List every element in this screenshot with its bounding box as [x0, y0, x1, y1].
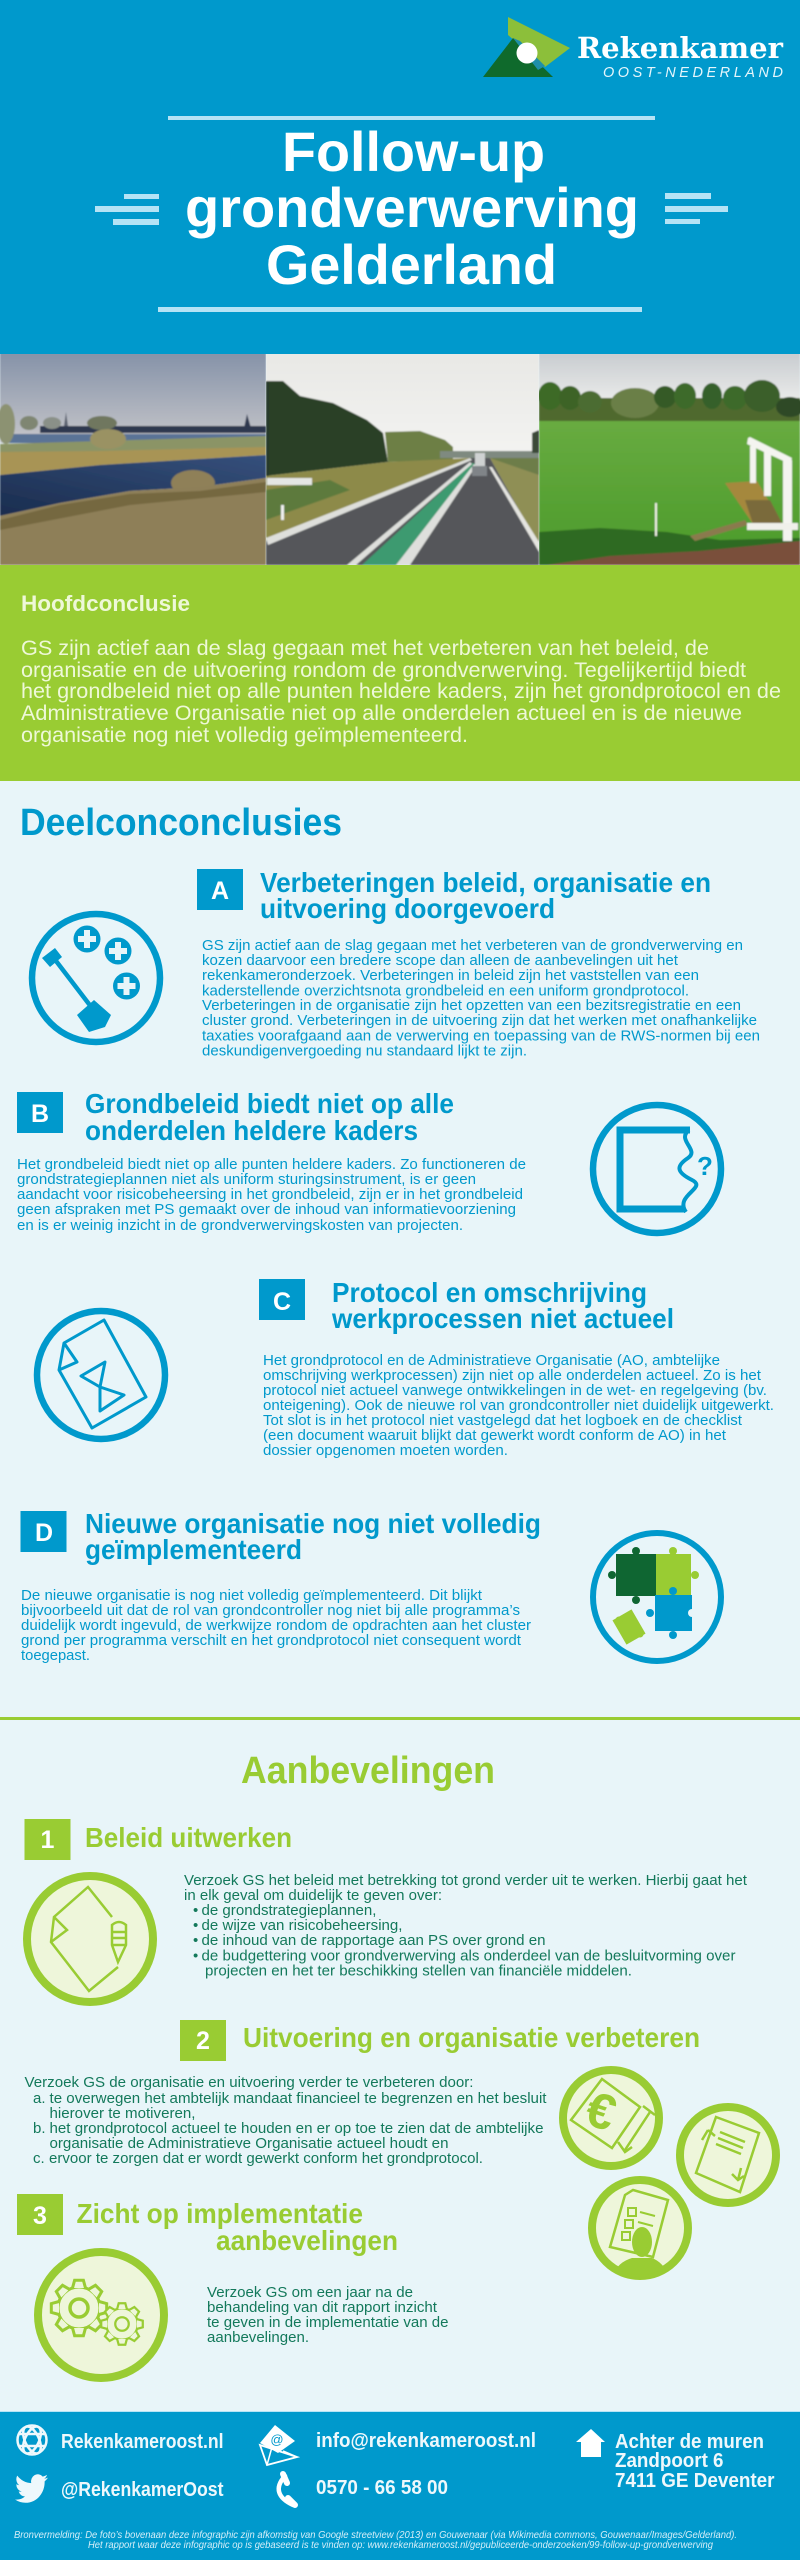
text: source credits: Bronvermelding: De foto’s bovenaan deze infographic zijn afkomstig van Google streetview (2013) en Gouwenaar (via Wikimedia commons, Gouwenaar/Images/Gelderland). — [14, 2529, 737, 2541]
panel: aanbeveling 1 — [24, 1819, 748, 2002]
text: aanbeveling 2 body: Verzoek GS de organisatie en uitvoering verder te verbeteren door: — [24, 2074, 474, 2091]
text: aanbeveling 1 body: de budgettering voor grondverwerving als onderdeel van de besluitvorming over — [202, 1948, 736, 1964]
heading: Aanbevelingen: Aanbevelingen — [241, 1750, 495, 1792]
badge: B — [17, 1092, 63, 1133]
heading: aanbeveling 3: aanbevelingen — [216, 2225, 398, 2256]
text: aanbeveling 1 body: in elk geval om duidelijk te geven over: — [184, 1887, 442, 1904]
text: aanbeveling 1 body: de grondstrategieplannen, — [202, 1902, 376, 1919]
text: aanbeveling 2 body: ervoor te zorgen dat er wordt gewerkt conform het grondprotocol. — [49, 2150, 483, 2167]
text: conclusie C body: dossier opgenomen moeten worden. — [263, 1442, 508, 1459]
icon: document with cycle arrows — [680, 2107, 776, 2203]
text: conclusie A body: cluster grond. Verbeteringen in de uitvoering zijn dat het werken met onafhankelijke — [202, 1012, 757, 1029]
heading: conclusie B: Grondbeleid biedt niet op alle — [85, 1088, 454, 1119]
panel: aanbeveling 3 — [17, 2194, 448, 2378]
text: conclusie C body — [263, 1352, 774, 1459]
title: Follow-up grondverwerving Gelderland: grondverwerving — [185, 176, 639, 239]
text: source credits — [14, 2529, 737, 2551]
text: phone number: 0570 - 66 58 00 — [316, 2477, 448, 2499]
text: address — [615, 2431, 775, 2492]
text: source credits: Het rapport waar deze infographic op is gebaseerd is te vinden op: www.rekenkameroost.nl/gepubliceerde-onderzoeken/99-follow-up-grondverwerving — [88, 2539, 713, 2551]
photo: river landscape — [0, 353, 266, 565]
icon: document with wavy edge and question mark — [593, 1105, 721, 1233]
icon: shovel with plus signs — [32, 914, 160, 1042]
photo: green meadow with bench — [538, 353, 800, 565]
text: address: Zandpoort 6 — [615, 2450, 724, 2472]
text: conclusie C body: onteigening). Ook de nieuwe rol van grondcontroller niet duidelijk uitgewerkt. — [263, 1397, 774, 1414]
text: hoofdconclusie body: het grondbeleid niet op alle punten heldere kaders, zijn het grondprotocol en de — [21, 680, 781, 703]
text: conclusie B body — [17, 1156, 526, 1234]
text: conclusie C body: Het grondprotocol en de Administratieve Organisatie (AO, ambtelijke — [263, 1352, 720, 1369]
heading: conclusie A — [260, 867, 711, 924]
badge: 1 — [24, 1819, 70, 1860]
icon: document with pencil — [27, 1876, 153, 2002]
text: conclusie D body: De nieuwe organisatie is nog niet volledig geïmplementeerd. Dit blijkt — [21, 1587, 483, 1604]
text: conclusie C body: (een document waaruit blijkt dat gewerkt wordt conform de AO) in het — [263, 1427, 727, 1444]
icon: globe — [18, 2424, 46, 2456]
logo: Rekenkamer Oost-Nederland — [483, 17, 784, 81]
title: Follow-up grondverwerving Gelderland: Follow-up — [282, 120, 545, 183]
title: Follow-up grondverwerving Gelderland: Gelderland — [266, 233, 557, 296]
text: conclusie B body: Het grondbeleid biedt niet op alle punten heldere kaders. Zo functioneren de — [17, 1156, 526, 1173]
text: aanbeveling 1 body: projecten en het ter beschikking stellen van financiële middelen. — [205, 1962, 632, 1980]
text: aanbeveling 2 body: c. — [33, 2150, 45, 2167]
panel: header — [0, 0, 800, 354]
text: conclusie D body: grond per programma verschilt en het grondprotocol niet consequent wordt — [21, 1632, 522, 1649]
text: conclusie D body: duidelijk wordt ingevuld, de werkwijze rondom de opdrachten aan het cluster — [21, 1617, 531, 1634]
text: aanbeveling 2 body: te overwegen het ambtelijk mandaat financieel te begrenzen en het besluit — [50, 2090, 547, 2107]
text: conclusie A body — [202, 937, 760, 1060]
text: aanbeveling 2 body: het grondprotocol actueel te houden en er op toe te zien dat de ambtelijke — [50, 2120, 544, 2137]
icon: document with hourglass — [37, 1311, 165, 1439]
badge: A: A — [211, 877, 229, 905]
text: aanbeveling 2 body: a. — [33, 2090, 46, 2107]
text: aanbeveling 3 body: te geven in de implementatie van de — [207, 2314, 448, 2331]
panel: conclusie C — [37, 1277, 774, 1459]
icon: gears — [38, 2252, 164, 2378]
text: conclusie C body: protocol niet actueel vanwege ontwikkelingen in de wet- en regelgeving (bv. — [263, 1382, 767, 1399]
panel: conclusie B — [17, 1088, 721, 1234]
text: conclusie A body: deskundigenvergoeding nu standaard lijkt te zijn. — [202, 1042, 527, 1060]
logo: Rekenkamer Oost-Nederland: Rekenkamer — [577, 31, 784, 65]
text: conclusie A body: GS zijn actief aan de slag gegaan met het verbeteren van de grondverwerving en — [202, 937, 743, 954]
photo: road with green lane — [266, 353, 539, 565]
text: conclusie A body: Verbeteringen in de organisatie zijn het opzetten van een bezitsregistratie en een — [202, 997, 741, 1014]
text: conclusie A body: kozen daarvoor een bredere scope dan alleen de aanbevelingen uit het — [202, 952, 679, 969]
text: aanbeveling 1 body: de inhoud van de rapportage aan PS over grond en — [202, 1932, 546, 1949]
text: aanbeveling 1 body: • — [193, 1917, 198, 1934]
text: aanbeveling 2 body: hierover te motiveren, — [50, 2105, 196, 2122]
heading: Hoofdconclusie: Hoofdconclusie — [21, 591, 190, 616]
icon: puzzle pieces — [593, 1533, 721, 1661]
badge: 2: 2 — [196, 2027, 210, 2055]
text: conclusie C body: Tot slot is in het protocol niet vastgelegd dat het logboek en de checklist — [263, 1412, 743, 1429]
heading: aanbeveling 3: Zicht op implementatie — [76, 2198, 363, 2229]
text: email: info@rekenkameroost.nl — [316, 2430, 536, 2452]
heading: Deelconconclusies: Deelconconclusies — [20, 802, 342, 844]
heading: conclusie B: onderdelen heldere kaders — [85, 1115, 418, 1146]
icon: phone — [279, 2474, 295, 2505]
text: aanbeveling 1 body: • — [193, 1902, 198, 1919]
text: aanbeveling 1 body: Verzoek GS het beleid met betrekking tot grond verder uit te werken. Hierbij gaat het — [184, 1872, 748, 1889]
text: aanbeveling 3 body — [207, 2284, 448, 2346]
badge: C: C — [273, 1288, 291, 1316]
divider line — [0, 1717, 800, 1720]
text: aanbeveling 3 body: aanbevelingen. — [207, 2329, 309, 2346]
text: aanbeveling 3 body: behandeling van dit rapport inzicht — [207, 2299, 438, 2316]
text: address: 7411 GE Deventer — [615, 2470, 775, 2492]
badge: 3: 3 — [33, 2202, 47, 2230]
text: conclusie A body: rekenkameronderzoek. Verbeteringen in beleid zijn het vaststellen van een — [202, 967, 699, 984]
text: conclusie B body: aandacht voor risicobeheersing in het grondbeleid, zijn er in het grondbeleid — [17, 1186, 523, 1203]
badge: D — [20, 1511, 66, 1552]
heading: conclusie C — [331, 1277, 674, 1334]
title: Follow-up grondverwerving Gelderland — [95, 116, 728, 312]
heading: conclusie D — [85, 1508, 541, 1565]
text: aanbeveling 1 body: • — [193, 1948, 198, 1964]
heading: aanbeveling 3 — [76, 2198, 398, 2256]
heading: conclusie A: uitvoering doorgevoerd — [260, 893, 555, 924]
text: conclusie D body: bijvoorbeeld uit dat de rol van grondcontroller nog niet bij alle programma’s — [21, 1602, 520, 1619]
icon: envelope: @ — [270, 2432, 284, 2447]
badge: 2 — [180, 2020, 226, 2061]
heading: conclusie C: werkprocessen niet actueel — [331, 1303, 674, 1334]
text: aanbeveling 2 body: b. — [33, 2120, 46, 2137]
heading: conclusie D: geïmplementeerd — [85, 1534, 302, 1565]
badge: D: D — [35, 1519, 53, 1547]
icon: checklist with person — [592, 2180, 688, 2280]
badge: 3 — [17, 2194, 63, 2235]
icon: document with wavy edge and question mark: ? — [697, 1151, 713, 1181]
icon: euro document: € — [579, 2080, 623, 2142]
text: hoofdconclusie body: organisatie nog niet volledig geïmplementeerd. — [21, 724, 468, 747]
logo: Rekenkamer Oost-Nederland: OOST-NEDERLAND — [603, 65, 783, 81]
heading: aanbeveling 1: Beleid uitwerken — [85, 1822, 292, 1853]
icon: address arrow — [576, 2429, 605, 2457]
text: aanbeveling 2 body — [24, 2074, 547, 2167]
heading: aanbeveling 2: Uitvoering en organisatie verbeteren — [243, 2022, 700, 2053]
text: hoofdconclusie body: organisatie en de uitvoering rondom de grondverwerving. Tegelijkertijd biedt — [21, 659, 746, 682]
badge: 1: 1 — [41, 1826, 55, 1854]
text: hoofdconclusie body: GS zijn actief aan de slag gegaan met het verbeteren van het beleid, de — [21, 637, 709, 660]
text: conclusie B body: geen afspraken met PS gemaakt over de inhoud van informatievoorziening — [17, 1201, 516, 1218]
text: conclusie D body: toegepast. — [21, 1647, 90, 1664]
text: address: Achter de muren — [615, 2431, 764, 2453]
text: conclusie C body: omschrijving werkprocessen) zijn niet op alle onderdelen actueel. Zo is het — [263, 1367, 762, 1384]
badge: B: B — [31, 1100, 49, 1128]
text: conclusie B body: grondstrategieplannen niet als uniform sturingsinstrument, is er geen — [17, 1171, 476, 1188]
panel: footer — [0, 2411, 800, 2560]
icon: envelope — [260, 2425, 297, 2465]
heading: conclusie C: Protocol en omschrijving — [332, 1277, 647, 1308]
text: conclusie D body — [21, 1587, 531, 1664]
text: conclusie A body: taxaties voorafgaand aan de verwerving en toepassing van de RWS-normen bij een — [202, 1028, 760, 1044]
text: aanbeveling 1 body: • — [193, 1932, 198, 1949]
text: twitter handle: @RekenkamerOost — [61, 2479, 224, 2501]
text: aanbeveling 2 body: organisatie de Administratieve Organisatie actueel houdt en — [50, 2135, 449, 2152]
badge: A — [197, 869, 243, 910]
heading: conclusie B — [85, 1088, 454, 1146]
panel: conclusie A — [32, 867, 760, 1060]
text: conclusie B body: en is er weinig inzicht in de grondverwervingskosten van projecten. — [17, 1217, 463, 1234]
text: aanbeveling 3 body: Verzoek GS om een jaar na de — [207, 2284, 413, 2301]
badge: C — [259, 1279, 305, 1320]
icon: euro document — [563, 2070, 659, 2166]
heading: conclusie D: Nieuwe organisatie nog niet volledig — [85, 1508, 541, 1539]
text: hoofdconclusie body: Administratieve Organisatie niet op alle onderdelen actueel en is de nieuwe — [21, 702, 742, 725]
text: conclusie A body: kaderstellende overzichtsnota grondbeleid en een uniform grondprotocol. — [202, 982, 689, 1000]
text: website: Rekenkameroost.nl — [61, 2431, 224, 2453]
text: aanbeveling 1 body — [184, 1872, 748, 1980]
icon: twitter bird — [15, 2474, 48, 2503]
text: aanbeveling 1 body: de wijze van risicobeheersing, — [202, 1917, 402, 1934]
panel: aanbeveling 2 — [24, 2020, 776, 2280]
heading: conclusie A: Verbeteringen beleid, organisatie en — [260, 867, 711, 898]
panel: hoofdconclusie — [0, 565, 800, 781]
panel: conclusie D — [20, 1508, 721, 1664]
text: hoofdconclusie body — [21, 637, 781, 747]
